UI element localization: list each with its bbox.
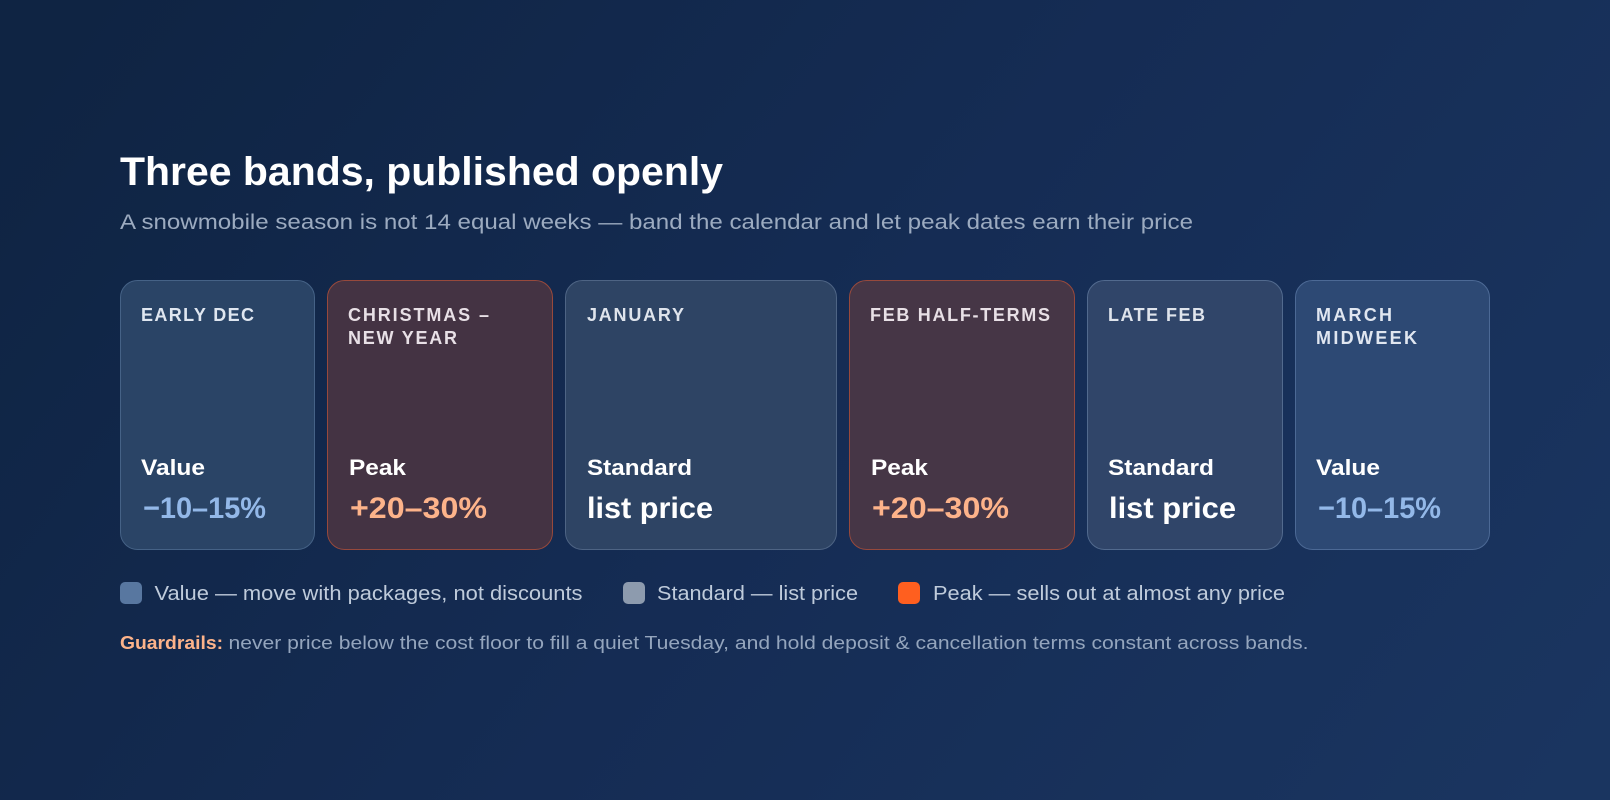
panel: christmas new year: Peak <box>349 455 407 480</box>
legend: value: Value — move with packages, not discounts <box>154 583 582 605</box>
panel: march midweek: Value <box>1316 455 1380 480</box>
panel: feb half-terms <box>850 280 1074 550</box>
panel: late feb: LATE FEB <box>1108 305 1205 325</box>
panel: january: Standard <box>587 455 692 480</box>
panel: late feb: list price <box>1109 492 1236 525</box>
legend: peak: Peak — sells out at almost any price <box>933 583 1285 605</box>
subtitle: A snowmobile season is not 14 equal weeks — band the calendar and let peak dates earn their price <box>120 211 1193 234</box>
panel: feb half-terms: Peak <box>871 455 929 480</box>
guardrails note: never price below the cost floor to fill a quiet Tuesday, and hold deposit & cancellation terms constant across bands. <box>228 632 1308 653</box>
panel: march midweek: MIDWEEK <box>1316 328 1417 348</box>
legend: standard: Standard — list price <box>657 583 858 605</box>
panel: late feb <box>1088 280 1282 550</box>
panel: early dec: −10–15% <box>143 492 266 525</box>
panel: feb half-terms: +20–30% <box>872 492 1009 525</box>
panel: march midweek: MARCH <box>1316 305 1392 325</box>
guardrails note: Guardrails: <box>120 632 223 653</box>
panel: early dec: Value <box>141 455 205 480</box>
panel: late feb: Standard <box>1108 455 1214 480</box>
panel: early dec: EARLY DEC <box>141 305 254 325</box>
panel: march midweek <box>1296 280 1490 550</box>
panel: christmas new year: CHRISTMAS – <box>348 305 489 325</box>
panel: january: JANUARY <box>587 305 684 325</box>
panel: christmas new year: +20–30% <box>350 492 487 525</box>
panel: feb half-terms: FEB HALF-TERMS <box>870 305 1050 325</box>
panel: christmas new year: NEW YEAR <box>348 328 457 348</box>
panel: january <box>566 280 836 550</box>
panel: january: list price <box>587 492 713 525</box>
title: Three bands, published openly <box>120 150 724 194</box>
panel: early dec <box>120 280 314 550</box>
panel: march midweek: −10–15% <box>1318 492 1441 525</box>
panel: christmas new year <box>328 280 552 550</box>
